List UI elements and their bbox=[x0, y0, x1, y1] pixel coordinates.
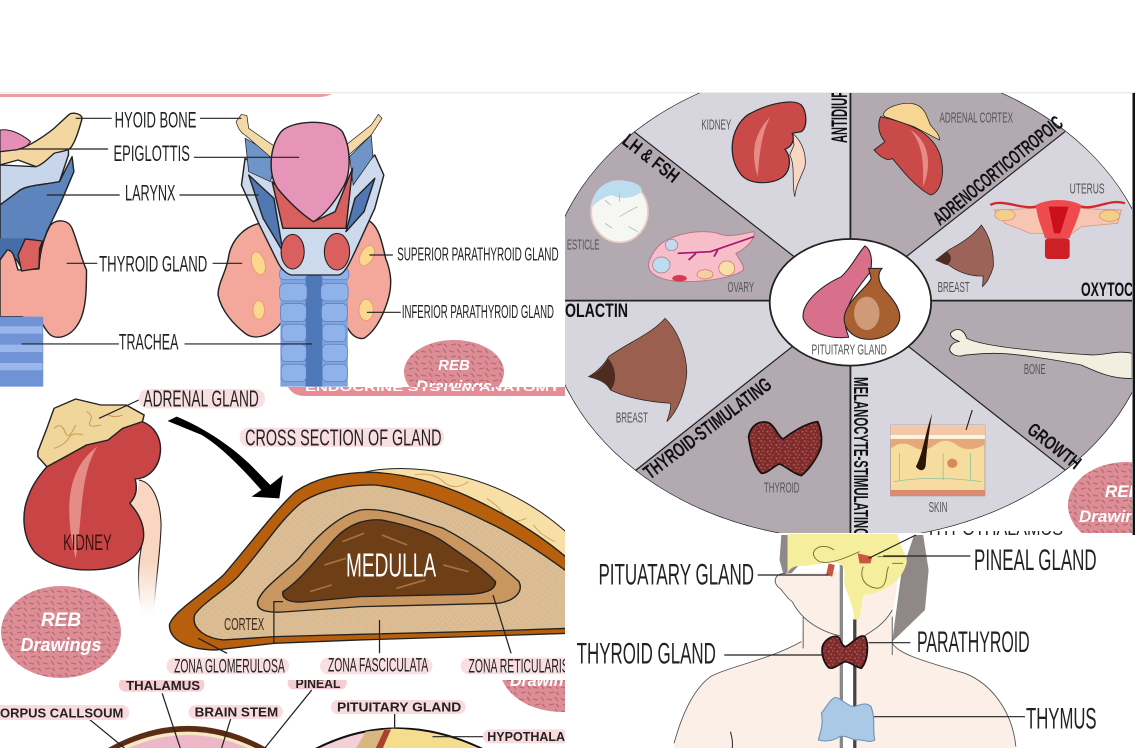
chart: adrenal cross section bbox=[169, 469, 569, 653]
watermark: REB drawings, brain strip: Drawin bbox=[510, 673, 564, 690]
brain labels: ORPUS CALLSOUM bbox=[0, 705, 123, 720]
infographic canvas: INFERIOR PARATHYROID GLAND bbox=[402, 302, 554, 323]
panel: pituitary hormone wheel: OVARY bbox=[728, 280, 754, 296]
icon: ovary bbox=[649, 232, 754, 296]
sector labels: MELANOCYTE-STIMULATING bbox=[849, 377, 871, 537]
sector labels: THYROID-STIMULATING bbox=[640, 374, 776, 484]
larynx labels: TRACHEA bbox=[119, 329, 179, 354]
brain labels bbox=[0, 676, 573, 744]
wheel sectors bbox=[565, 93, 1132, 533]
icon: kidney with adrenal cortex bbox=[874, 103, 1013, 195]
larynx labels: HYOID BONE bbox=[115, 107, 196, 132]
icon: testicle: ESTICLE bbox=[567, 237, 600, 253]
watermark: REB drawings, wheel panel bbox=[1068, 462, 1132, 533]
pink banner strip: ENDOCRINE SYSTEM ANATOMY bbox=[305, 382, 561, 394]
heading: adrenal gland: ADRENAL GLAND bbox=[143, 387, 259, 412]
panel: larynx and thyroid bbox=[0, 107, 559, 387]
icon: bone: BONE bbox=[1024, 362, 1046, 378]
icon: breast (oxytocin) bbox=[936, 225, 993, 296]
leader lines bbox=[18, 118, 401, 344]
icon: breast (oxytocin): BREAST bbox=[938, 280, 970, 296]
illustration: brain bbox=[788, 534, 907, 619]
pituitary section illustration bbox=[314, 713, 485, 748]
icon: kidney (antidiuretic) bbox=[701, 102, 806, 197]
right edge bar bbox=[1132, 93, 1135, 535]
icon: breast (prolactin) bbox=[589, 318, 687, 426]
larynx labels: LARYNX bbox=[125, 180, 176, 205]
icon: bone bbox=[950, 329, 1132, 378]
brain section illustration bbox=[89, 690, 312, 748]
icon: uterus: UTERUS bbox=[1070, 181, 1105, 197]
labels: THYROID GLAND bbox=[577, 637, 716, 670]
icon: thymus bbox=[818, 697, 875, 741]
illustration: spinal cord bbox=[841, 565, 855, 748]
icon: skin cross section bbox=[890, 410, 985, 516]
watermark: REB drawings, brain strip bbox=[502, 680, 565, 712]
sector labels: OLACTIN bbox=[565, 301, 628, 322]
larynx labels: EPIGLOTTIS bbox=[114, 141, 190, 166]
sector labels: GROWTH bbox=[1023, 419, 1085, 474]
center: pituitary gland bbox=[770, 239, 931, 366]
leader lines bbox=[724, 535, 1025, 717]
panel: adrenal gland bbox=[24, 387, 572, 677]
pink banner strip bbox=[288, 387, 565, 396]
panel: pituitary hormone wheel bbox=[565, 93, 1132, 533]
icon: pineal bbox=[858, 553, 872, 563]
infographic canvas: SUPERIOR PARATHYROID GLAND bbox=[397, 244, 559, 265]
sector labels: ANTIDIUF bbox=[827, 91, 852, 143]
brain labels: BRAIN STEM bbox=[195, 704, 278, 720]
icon: uterus bbox=[990, 181, 1125, 259]
illustration: body outline bbox=[674, 535, 1016, 748]
brain labels: THALAMUS bbox=[126, 678, 200, 693]
watermark: REB drawings, larynx panel: REB bbox=[438, 357, 470, 374]
page top bar bbox=[0, 92, 1135, 97]
arrow: to cross section bbox=[168, 417, 283, 498]
panel: brain anatomy strip bbox=[0, 680, 565, 748]
watermark: REB drawings, adrenal panel: Drawings bbox=[20, 635, 102, 655]
watermark: REB drawings, larynx panel bbox=[404, 340, 504, 387]
zone labels: ZONA GLOMERULOSA bbox=[174, 656, 285, 677]
icon: skin cross section: SKIN bbox=[929, 500, 948, 516]
icon: kidney with adrenal cortex: ADRENAL CORTEX bbox=[940, 110, 1013, 126]
brain labels: HYPOTHALA bbox=[487, 729, 565, 744]
sector labels bbox=[565, 91, 1133, 537]
heading: cross section of gland bbox=[240, 428, 444, 447]
icon: kidney (antidiuretic): KIDNEY bbox=[701, 117, 731, 133]
icon: thyroid gland bbox=[822, 636, 867, 668]
icon: thyroid: THYROID bbox=[764, 480, 800, 496]
chart: adrenal cross section: CORTEX bbox=[224, 614, 264, 634]
left larynx illustration bbox=[0, 113, 86, 387]
labels: PITUATARY GLAND bbox=[598, 558, 754, 591]
icon: thyroid bbox=[749, 422, 821, 496]
heading: cross section of gland: CROSS SECTION OF GLAND bbox=[245, 426, 441, 451]
icon: kidney with adrenal gland bbox=[24, 399, 161, 615]
illustration: brain folds bbox=[813, 546, 907, 588]
panel: human body endocrine glands bbox=[577, 534, 1097, 748]
icon: kidney with adrenal gland: KIDNEY bbox=[63, 530, 112, 555]
larynx labels: THYROID GLAND bbox=[99, 251, 207, 276]
zone labels: ZONA RETICULARIS bbox=[469, 656, 569, 677]
icon: breast (prolactin): BREAST bbox=[616, 410, 648, 426]
chart: adrenal cross section: MEDULLA bbox=[346, 548, 437, 584]
watermark: REB drawings, larynx panel: Drawings bbox=[416, 377, 492, 396]
right larynx illustration bbox=[218, 114, 391, 387]
clipped label: hypothalamus: HYPOTHALAMUS bbox=[929, 519, 1063, 540]
icon: testicle bbox=[567, 181, 648, 253]
zone labels: ZONA FASCICULATA bbox=[328, 655, 428, 676]
brain labels: PINEAL bbox=[296, 676, 341, 691]
icon: pituitary bbox=[826, 563, 835, 577]
sector labels: LH & FSH bbox=[618, 130, 683, 188]
center: pituitary gland: PITUITARY GLAND bbox=[812, 342, 887, 358]
watermark: REB drawings, adrenal panel: REB bbox=[41, 610, 81, 631]
brain labels: PITUITARY GLAND bbox=[337, 699, 461, 715]
watermark: REB drawings, adrenal panel bbox=[1, 586, 121, 678]
heading: adrenal gland bbox=[138, 389, 265, 408]
larynx labels bbox=[99, 107, 559, 354]
labels bbox=[577, 543, 1097, 735]
zone labels bbox=[166, 658, 565, 674]
